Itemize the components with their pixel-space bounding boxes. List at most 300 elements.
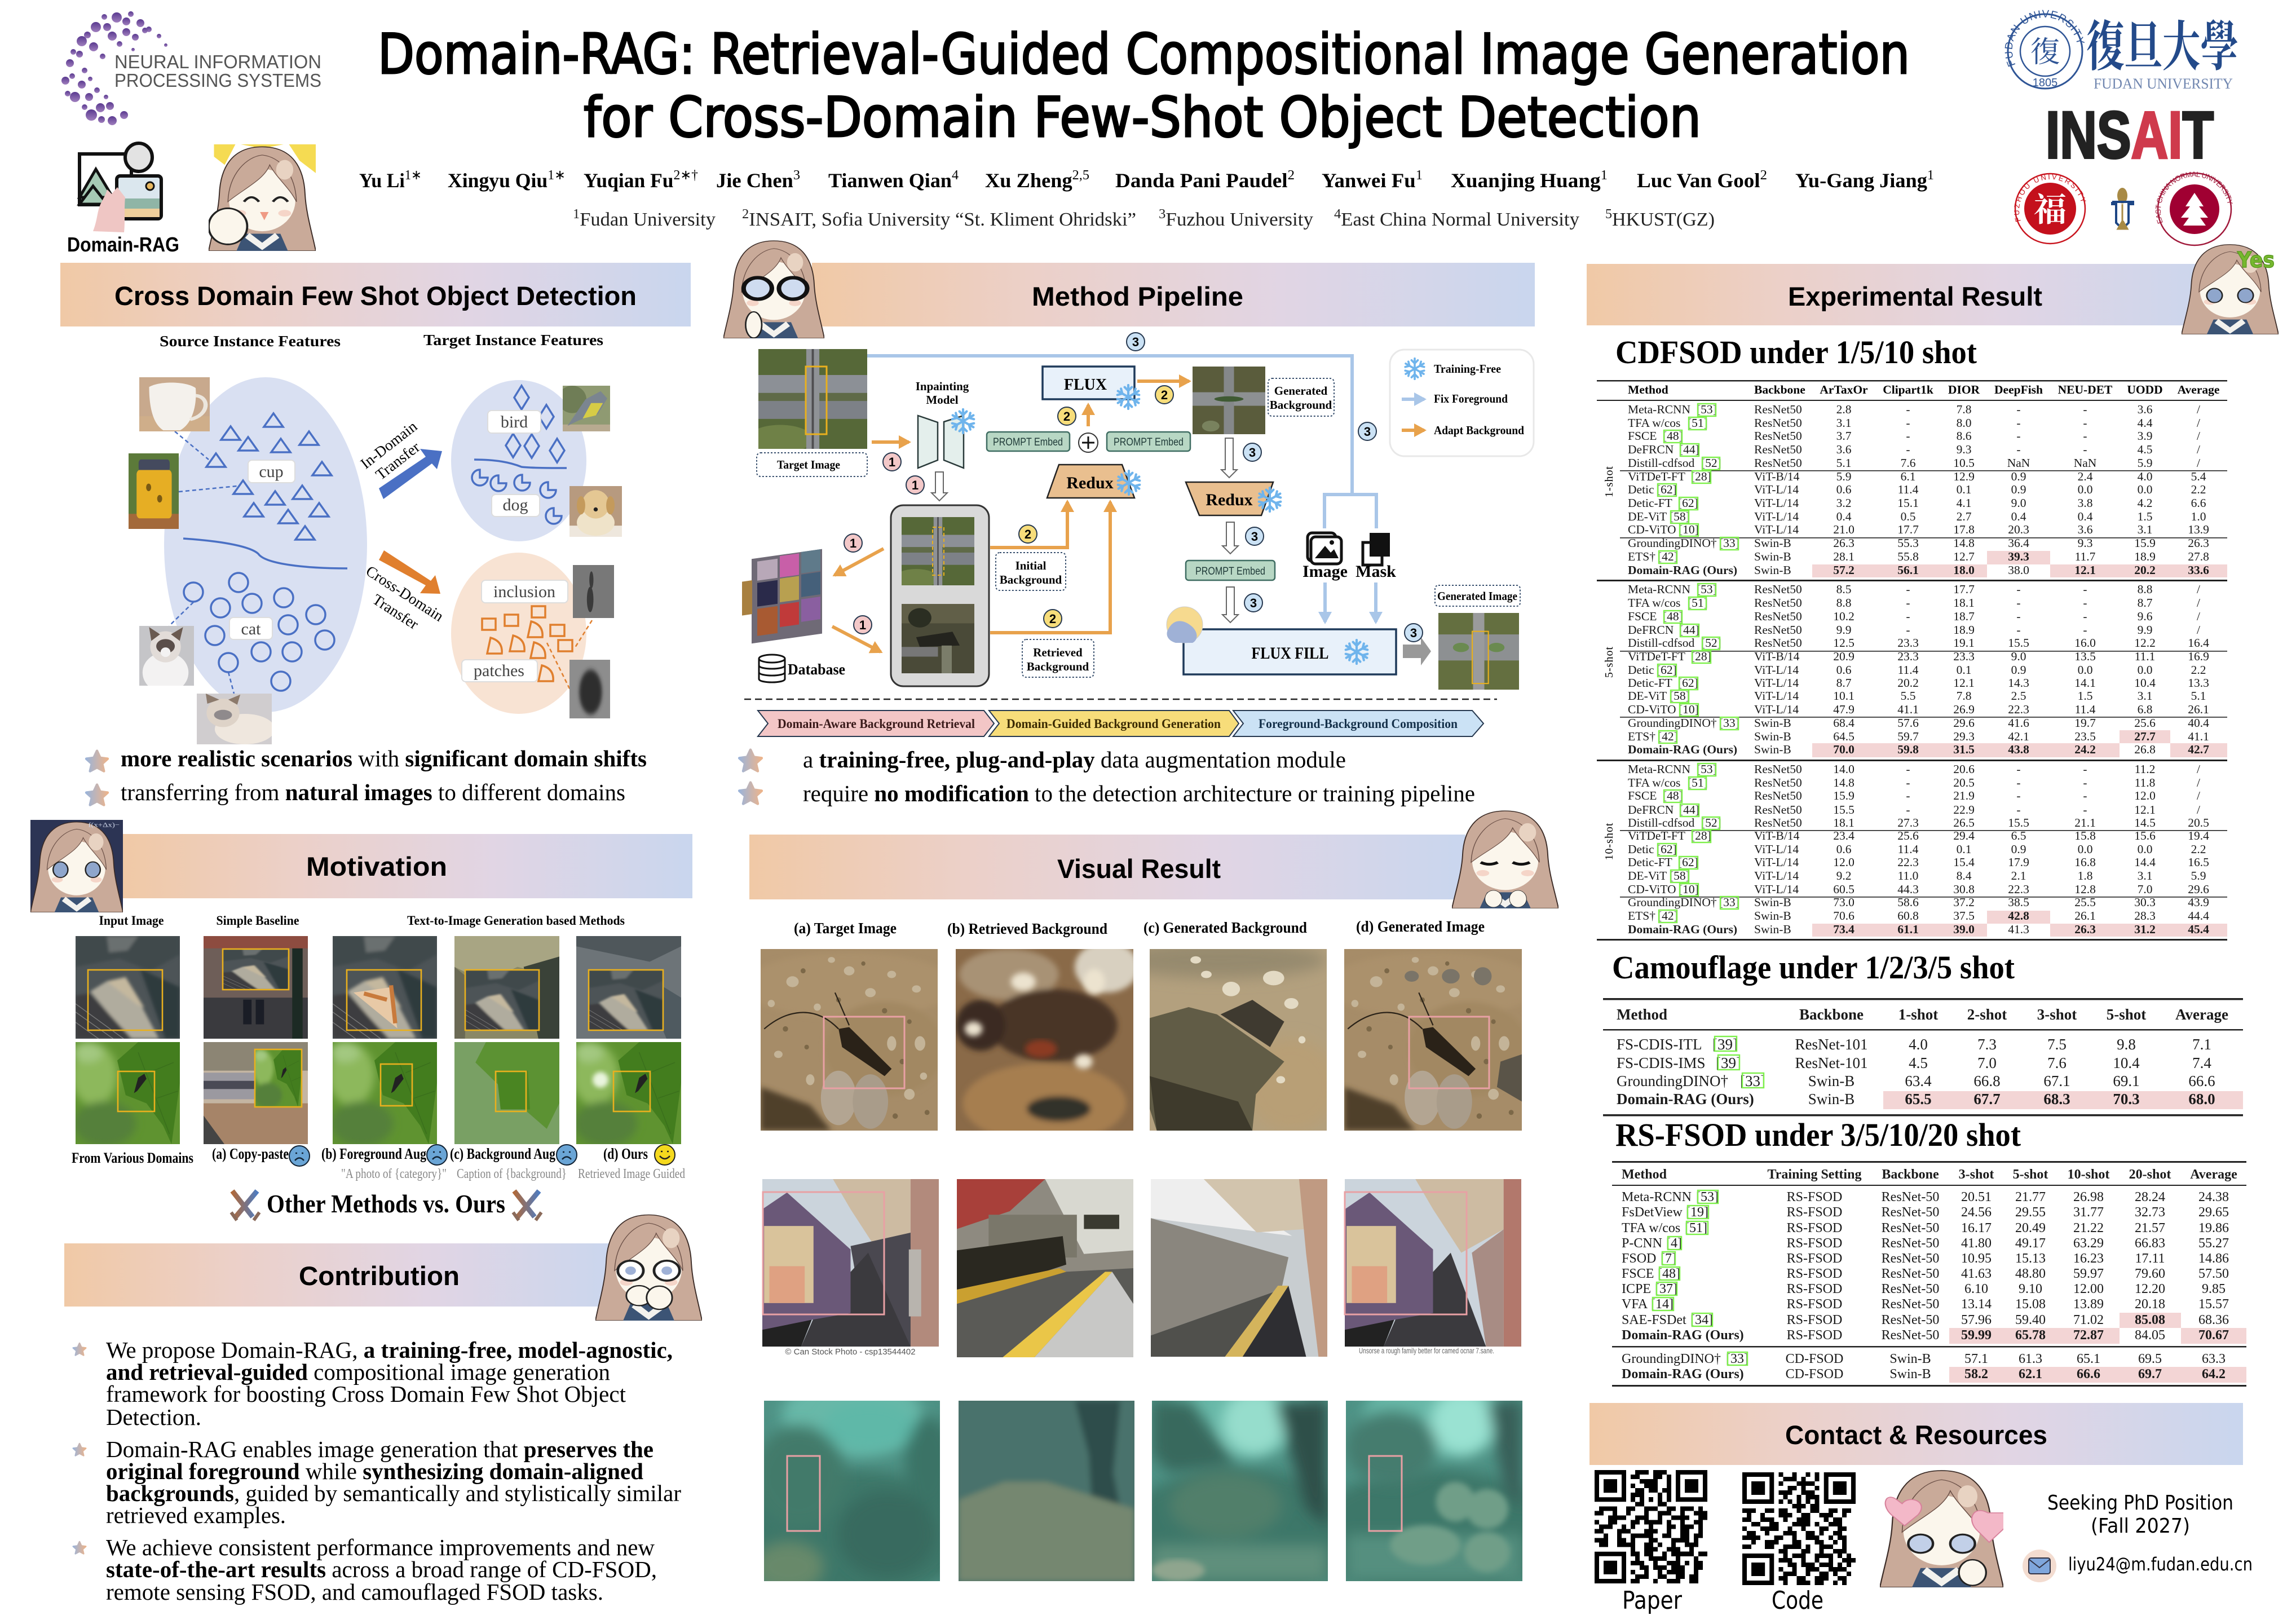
table: CDFSOD results: 7.0 <box>2138 882 2152 896</box>
table: CDFSOD results: ResNet50 <box>1754 456 1802 470</box>
step markers: 1 <box>850 536 856 550</box>
table: CDFSOD results: CD-ViTO <box>1628 882 1676 896</box>
table: CDFSOD results: 37.5 <box>1953 909 1975 923</box>
table: CDFSOD results: 14.5 <box>2134 816 2156 829</box>
table: RS-FSOD results: RS-FSOD <box>1787 1251 1842 1266</box>
table: RS-FSOD results: RS-FSOD <box>1787 1221 1842 1235</box>
bullet list: contributions: remote sensing FSOD, and camouflaged FSOD tasks. <box>106 1579 603 1605</box>
authors: 4 <box>952 168 959 183</box>
table: CDFSOD results: 55.8 <box>1897 550 1919 563</box>
table: RS-FSOD results: SAE-FSDet <box>1622 1313 1686 1327</box>
table: Camouflage results: 68.0 <box>2188 1091 2215 1107</box>
avatar: thinking <box>30 820 123 912</box>
table: RS-FSOD results: ResNet-50 <box>1882 1282 1939 1296</box>
table: RS-FSOD results: 64.2 <box>2202 1367 2226 1382</box>
table: CDFSOD results: Swin-B <box>1754 923 1791 936</box>
table: CDFSOD results: - <box>2083 762 2087 776</box>
table: Camouflage results: 1-shot <box>1898 1006 1938 1023</box>
image: generated background <box>1193 367 1265 434</box>
logo: INSAIT: INSAIT <box>2046 98 2214 173</box>
icon: snowflake <box>1259 488 1281 511</box>
table: CDFSOD results: 2.4 <box>2078 470 2093 483</box>
table: CDFSOD results: 30.3 <box>2134 895 2156 909</box>
table: CDFSOD results: 18.0 <box>1953 563 1975 577</box>
authors: Yu-Gang Jiang <box>1795 169 1926 192</box>
table: CDFSOD results: 41.6 <box>2008 716 2029 730</box>
icon: sun <box>1167 607 1203 643</box>
table: CDFSOD results: 59.8 <box>1897 743 1919 756</box>
figure: image comparison grid: From Various Domains <box>72 1150 193 1166</box>
table: RS-FSOD results: 63.29 <box>2073 1236 2104 1251</box>
table: CDFSOD results: 56.1 <box>1897 563 1919 577</box>
arrow <box>1221 438 1237 478</box>
logo: NeurIPS: PROCESSING SYSTEMS <box>114 70 321 91</box>
table: RS-FSOD results: VFA <box>1622 1297 1648 1312</box>
table: CDFSOD results: 4.0 <box>2138 470 2152 483</box>
table: CDFSOD results: 20.6 <box>1953 762 1975 776</box>
table: CDFSOD results: 23.5 <box>2074 730 2096 743</box>
bullet list: contributions: retrieved examples. <box>106 1502 286 1528</box>
table: CDFSOD results: - <box>1906 596 1910 610</box>
figure: image comparison grid: (c) Background Aug <box>450 1145 555 1162</box>
table: CDFSOD results: 9.3 <box>2078 536 2092 550</box>
table: CDFSOD results: 16.9 <box>2188 650 2209 663</box>
table: RS-FSOD results: 72.87 <box>2073 1328 2104 1343</box>
figure: image comparison grid: (b) Foreground Aug <box>321 1145 426 1162</box>
heading: Method Pipeline: Method Pipeline <box>1032 281 1243 311</box>
table: RS-FSOD results: FsDetView <box>1622 1205 1683 1220</box>
bullet list: contributions: backgrounds, guided by semantically and stylistically similar <box>106 1480 681 1506</box>
table: CDFSOD results: ResNet50 <box>1754 443 1802 456</box>
table: CDFSOD results: 26.3 <box>2188 536 2209 550</box>
table: CDFSOD results: Swin-B <box>1754 909 1791 923</box>
table: RS-FSOD results: 24.56 <box>1961 1205 1992 1220</box>
table: CDFSOD results: 15.9 <box>1833 789 1855 802</box>
table: RS-FSOD results: 10.95 <box>1961 1251 1992 1266</box>
table: CDFSOD results: 1-shot <box>1603 466 1615 497</box>
table: Camouflage results: 7.0 <box>1977 1054 1997 1071</box>
table: CDFSOD results: 16.0 <box>2074 636 2096 650</box>
table: CDFSOD results: 0.4 <box>2078 510 2093 523</box>
table: RS-FSOD results: 48.80 <box>2015 1266 2046 1281</box>
table: CDFSOD results: 27.8 <box>2188 550 2209 563</box>
label: retrieved background: Background <box>1027 660 1089 673</box>
table: CDFSOD results: 0.0 <box>2138 483 2152 496</box>
stage: domain-aware background retrieval <box>758 710 994 736</box>
table: CDFSOD results: 5.1 <box>2191 689 2206 703</box>
table: CDFSOD results: [10] <box>1679 882 1699 896</box>
table: RS-FSOD results: ResNet-50 <box>1882 1205 1939 1220</box>
table: CDFSOD results: Detic-FT <box>1628 855 1672 869</box>
table: CDFSOD results: 16.4 <box>2188 636 2209 650</box>
table: CDFSOD results: - <box>2016 429 2021 443</box>
table: CDFSOD results: 7.8 <box>1957 689 1971 703</box>
icon: sad face <box>427 1145 447 1165</box>
bullet points <box>86 745 647 805</box>
column labels: (c) Generated Background <box>1143 919 1307 936</box>
table: CDFSOD results: 2.8 <box>1836 403 1851 416</box>
table: CDFSOD results: 6.6 <box>2191 496 2206 510</box>
table: CDFSOD results: 0.9 <box>2011 842 2026 856</box>
table: CDFSOD results: ResNet50 <box>1754 816 1802 829</box>
bullet list: contributions: original foreground while synthesizing domain-aligned <box>106 1458 643 1484</box>
table: RS-FSOD results: 20-shot <box>2129 1167 2171 1182</box>
avatar: surprised <box>595 1215 702 1321</box>
icon: image: Image <box>1302 562 1348 581</box>
table: CDFSOD results: GroundingDINO† <box>1628 536 1717 550</box>
table: CDFSOD results: - <box>2083 789 2087 802</box>
table: CDFSOD results: 26.3 <box>2074 923 2096 936</box>
table: CDFSOD results: 29.4 <box>1953 829 1975 842</box>
figure: image comparison grid: "A photo of {category}" <box>341 1167 447 1181</box>
table: CDFSOD results: 14.0 <box>1833 762 1855 776</box>
table: CDFSOD results: 15.4 <box>1953 855 1975 869</box>
heading: Visual Result <box>749 835 1465 899</box>
table: RS-FSOD results: 29.55 <box>2015 1205 2046 1220</box>
authors: 1∗ <box>547 168 566 183</box>
stage: foreground-background composition <box>1233 710 1483 736</box>
table: RS-FSOD results: ResNet-50 <box>1882 1251 1939 1266</box>
table: CDFSOD results: - <box>2083 403 2087 416</box>
table: CDFSOD results: 25.6 <box>2134 716 2156 730</box>
table: Camouflage results: Swin-B <box>1808 1091 1855 1107</box>
bullet points: more realistic scenarios with significant domain shifts <box>121 745 647 771</box>
table: Camouflage results: Domain-RAG (Ours) <box>1617 1091 1754 1107</box>
table: CDFSOD results: [58] <box>1670 869 1690 882</box>
panel: Contribution <box>64 1215 702 1605</box>
table: CDFSOD results: Detic <box>1628 483 1654 496</box>
diagram: feature space transfer: Cross-Domain <box>363 562 447 625</box>
table: CDFSOD results: - <box>1906 803 1910 817</box>
table: RS-FSOD results: 79.60 <box>2135 1266 2165 1281</box>
table: CDFSOD results: 3.6 <box>2078 523 2093 536</box>
table: CDFSOD results: 25.5 <box>2074 895 2096 909</box>
table: CDFSOD results: 15.9 <box>2134 536 2156 550</box>
panel: Motivation <box>30 820 692 1220</box>
table: Camouflage results: [39] <box>1716 1054 1741 1071</box>
table: CDFSOD results: / <box>2197 443 2200 456</box>
table: CDFSOD results: [10] <box>1679 523 1699 536</box>
step markers: 3 <box>1410 626 1417 640</box>
table: CDFSOD results: [48] <box>1663 429 1683 443</box>
table: CDFSOD results: 14.8 <box>1953 536 1975 550</box>
table: CDFSOD results: 15.8 <box>2074 829 2096 842</box>
table: CDFSOD results: 38.0 <box>2008 563 2029 577</box>
table: CDFSOD results: Meta-RCNN <box>1628 403 1691 416</box>
table: RS-FSOD results: 15.13 <box>2015 1251 2046 1266</box>
step markers: 3 <box>1249 445 1256 460</box>
arrow <box>832 626 881 652</box>
table: CDFSOD results: / <box>2197 582 2200 596</box>
logo: Fudan University: 1805 <box>2033 77 2057 89</box>
panel: Experimental Result <box>1587 245 2279 1387</box>
table: CDFSOD results: 11.4 <box>1898 842 1919 856</box>
label: generated image <box>1435 585 1520 606</box>
table: RS-FSOD results: [4] <box>1666 1236 1682 1251</box>
image: target image <box>748 349 867 453</box>
table: CDFSOD results: 4.2 <box>2138 496 2152 510</box>
table: RS-FSOD results: 63.3 <box>2202 1352 2226 1366</box>
table: RS-FSOD results: 13.89 <box>2073 1297 2104 1312</box>
diagram: feature space transfer: bird <box>501 413 528 431</box>
table: RS-FSOD results: 65.78 <box>2015 1328 2046 1343</box>
table: RS-FSOD results: [34] <box>1690 1313 1713 1327</box>
affiliations: HKUST(GZ) <box>1612 209 1715 230</box>
table: CDFSOD results: 2.2 <box>2191 842 2206 856</box>
image: inclusion defect <box>573 565 614 618</box>
image: cat 2 <box>197 694 272 744</box>
bullet list: contributions: Detection. <box>106 1404 201 1430</box>
panel: Cross Domain Few Shot Object Detection <box>60 263 691 805</box>
table: CDFSOD results: 0.1 <box>1957 483 1971 496</box>
table: CDFSOD results: 0.1 <box>1957 663 1971 677</box>
table: CDFSOD results: 6.1 <box>1901 470 1915 483</box>
table: CDFSOD results: Meta-RCNN <box>1628 582 1691 596</box>
table: CDFSOD results: Clipart1k <box>1883 383 1933 396</box>
table: CDFSOD results: ResNet50 <box>1754 429 1802 443</box>
table: CDFSOD results: [62] <box>1657 842 1677 856</box>
table: CDFSOD results: / <box>2197 610 2200 623</box>
table: CDFSOD results: 0.9 <box>2011 470 2026 483</box>
table: CDFSOD results: - <box>1906 416 1910 430</box>
label: inpainting model: Inpainting <box>916 379 969 393</box>
table: RS-FSOD results: 69.5 <box>2138 1352 2162 1366</box>
table: CDFSOD results: 73.0 <box>1833 895 1855 909</box>
table: Camouflage results: 2-shot <box>1967 1006 2007 1023</box>
table: Camouflage results: 66.8 <box>1973 1073 2001 1089</box>
table: CDFSOD results: 3.6 <box>2138 403 2153 416</box>
table: RS-FSOD results: Backbone <box>1882 1167 1939 1182</box>
table: CDFSOD results: 0.0 <box>2078 842 2092 856</box>
label: inpainting model: Model <box>926 393 959 407</box>
table: CDFSOD results: 7.8 <box>1957 403 1971 416</box>
avatar: yes: Yes <box>2237 248 2275 272</box>
table: CDFSOD results: [48] <box>1663 789 1683 802</box>
table: CDFSOD results: - <box>2016 443 2021 456</box>
bullet points: a training-free, plug-and-play data augmentation module <box>803 747 1346 773</box>
stage: domain-aware background retrieval: Domain-Aware Background Retrieval <box>778 717 975 731</box>
table: CDFSOD results: Average <box>2178 383 2219 396</box>
table: CDFSOD results: 22.3 <box>1897 855 1919 869</box>
table: CDFSOD results: 8.5 <box>1836 582 1851 596</box>
table: CDFSOD results: 0.6 <box>1836 663 1852 677</box>
stage: domain-guided background generation: Domain-Guided Background Generation <box>1006 717 1221 731</box>
table: CDFSOD results: 22.3 <box>2008 703 2029 716</box>
table: CDFSOD results: / <box>2197 416 2200 430</box>
logo: HKUST <box>2112 188 2133 229</box>
table: RS-FSOD results: RS-FSOD <box>1787 1313 1842 1327</box>
table: CDFSOD results: [52] <box>1701 816 1721 829</box>
table: CDFSOD results: DIOR <box>1948 383 1980 396</box>
table: CDFSOD results: Detic-FT <box>1628 676 1672 690</box>
table: RS-FSOD results: 59.40 <box>2015 1313 2046 1327</box>
table: RS-FSOD results: 9.10 <box>2019 1282 2042 1296</box>
table: CDFSOD results <box>1597 380 2227 941</box>
table: RS-FSOD results: ResNet-50 <box>1882 1221 1939 1235</box>
table: CDFSOD results: ViT-B/14 <box>1754 470 1800 483</box>
table: CDFSOD results: 3.1 <box>2138 523 2152 536</box>
step markers: 1 <box>859 618 866 632</box>
table: CDFSOD results: 3.6 <box>1836 443 1852 456</box>
table: CDFSOD results: 14.1 <box>2074 676 2096 690</box>
table: CDFSOD results: 3.9 <box>2138 429 2152 443</box>
table: CDFSOD results: 42.1 <box>2008 730 2029 743</box>
table: CDFSOD results: - <box>2016 803 2021 817</box>
heading: Motivation <box>123 834 692 898</box>
icon: database <box>759 655 785 682</box>
table: CDFSOD results: 10.1 <box>1833 689 1855 703</box>
table: CDFSOD results: Backbone <box>1754 383 1805 396</box>
box: Redux: Redux <box>1066 474 1114 492</box>
table: CDFSOD results: 14.8 <box>1833 776 1855 789</box>
table: RS-FSOD results: [7] <box>1661 1251 1676 1266</box>
table: Camouflage results: Backbone <box>1799 1006 1864 1023</box>
table: CDFSOD results: CD-ViTO <box>1628 703 1676 716</box>
table: CDFSOD results: ViT-L/14 <box>1754 842 1799 856</box>
label: initial background: Initial <box>1015 559 1047 572</box>
table: RS-FSOD results: 28.24 <box>2135 1190 2165 1204</box>
table: CDFSOD results: 9.0 <box>2011 496 2026 510</box>
table: RS-FSOD results: 59.97 <box>2073 1266 2104 1281</box>
table: CDFSOD results: 38.5 <box>2008 895 2029 909</box>
table: CDFSOD results: 3.1 <box>2138 689 2152 703</box>
table: CDFSOD results: Swin-B <box>1754 563 1791 577</box>
table: CDFSOD results: DE-ViT <box>1628 689 1667 703</box>
table: RS-FSOD results: 68.36 <box>2198 1313 2229 1327</box>
table: CDFSOD results: ResNet50 <box>1754 762 1802 776</box>
table: RS-FSOD results: [37] <box>1655 1282 1677 1296</box>
table: CDFSOD results: DeFRCN <box>1628 623 1674 637</box>
authors: 1 <box>1601 168 1608 183</box>
QR code: code <box>1742 1472 1856 1585</box>
label: Code: Code <box>1772 1586 1823 1615</box>
table: CDFSOD results: 20.3 <box>2008 523 2029 536</box>
table: CDFSOD results: 68.4 <box>1833 716 1855 730</box>
table: CDFSOD results: [51] <box>1688 416 1708 430</box>
heading: Cross Domain Few Shot Object Detection <box>60 263 691 326</box>
arrow <box>1222 587 1238 623</box>
table: CDFSOD results: 5.9 <box>2191 869 2206 882</box>
authors: Xingyu Qiu <box>448 169 549 192</box>
table: RS-FSOD results: RS-FSOD <box>1787 1205 1842 1220</box>
step markers: 2 <box>1161 388 1168 402</box>
table: CDFSOD results: 26.8 <box>2134 743 2156 756</box>
table: CDFSOD results: 18.7 <box>1953 610 1975 623</box>
table: RS-FSOD results: 62.1 <box>2019 1367 2042 1382</box>
heading: Method Pipeline <box>812 263 1535 326</box>
table: RS-FSOD results: ResNet-50 <box>1882 1313 1939 1327</box>
table: CDFSOD results: ResNet50 <box>1754 803 1802 817</box>
table: CDFSOD results: NaN <box>2074 456 2097 470</box>
table: RS-FSOD results: Domain-RAG (Ours) <box>1622 1367 1744 1382</box>
table: CDFSOD results: Distill-cdfsod <box>1628 636 1694 650</box>
logo: Fuzhou University: 福 <box>2034 192 2067 228</box>
table: RS-FSOD results: 3-shot <box>1959 1167 1994 1182</box>
table: CDFSOD results: [62] <box>1678 855 1698 869</box>
box: Redux <box>1047 465 1134 498</box>
table: RS-FSOD results: ResNet-50 <box>1882 1190 1939 1204</box>
icon: mask <box>1355 533 1396 581</box>
logo: East China Normal University: EAST CHINA NORMAL UNIVERSITY <box>2155 171 2233 224</box>
table: CDFSOD results: 0.4 <box>2011 510 2026 523</box>
logo: Fuzhou University: FUZHOU UNIVERSITY <box>2014 174 2086 222</box>
table: CDFSOD results: 21.0 <box>1833 523 1855 536</box>
table: CDFSOD results: 20.9 <box>1833 650 1855 663</box>
label: generated background: Generated <box>1274 384 1328 398</box>
table: CDFSOD results: 18.1 <box>1833 816 1855 829</box>
arrow <box>1403 637 1431 665</box>
table: CDFSOD results: Swin-B <box>1754 743 1791 756</box>
table: RS-FSOD results: [33] <box>1726 1352 1749 1366</box>
box: FLUX: FLUX <box>1064 376 1107 394</box>
table: CDFSOD results: 29.3 <box>1953 730 1975 743</box>
table: CDFSOD results: 26.5 <box>1953 816 1975 829</box>
table: CDFSOD results: 5.5 <box>1901 689 1915 703</box>
table: CDFSOD results: - <box>2083 582 2087 596</box>
table: RS-FSOD results: 6.10 <box>1964 1282 1988 1296</box>
table: RS-FSOD results <box>1612 1161 2246 1387</box>
table: Camouflage results: 7.1 <box>2192 1036 2211 1053</box>
table: CDFSOD results: 43.9 <box>2188 895 2209 909</box>
table: CDFSOD results: 11.4 <box>1898 663 1919 677</box>
table: CDFSOD results: 1.0 <box>2191 510 2206 523</box>
table: RS-FSOD results: GroundingDINO† <box>1622 1352 1721 1366</box>
table: CDFSOD results: 10.5 <box>1953 456 1975 470</box>
table: CDFSOD results: Method <box>1628 383 1668 396</box>
table: CDFSOD results: 45.4 <box>2188 923 2209 936</box>
table: CDFSOD results: - <box>2016 596 2021 610</box>
diagram: feature space transfer: Target Instance Features <box>423 332 603 348</box>
table: CDFSOD results: 23.4 <box>1833 829 1855 842</box>
table: CDFSOD results: TFA w/cos <box>1628 596 1680 610</box>
table: RS-FSOD results: 49.17 <box>2015 1236 2046 1251</box>
arrow <box>931 472 947 501</box>
label: target image <box>757 453 867 476</box>
image: cup <box>139 377 210 431</box>
table: CDFSOD results: 60.5 <box>1833 882 1855 896</box>
logo: Fudan University: FUDAN UNIVERSITY <box>2094 76 2233 92</box>
table: RS-FSOD results: 61.3 <box>2019 1352 2042 1366</box>
box: FLUX FILL <box>1184 629 1396 674</box>
table: RS-FSOD results: [19] <box>1686 1205 1708 1220</box>
label: generated background <box>1268 378 1334 416</box>
table: CDFSOD results: [62] <box>1678 496 1698 510</box>
table: CDFSOD results: 28.3 <box>2134 909 2156 923</box>
authors: 3 <box>793 168 800 183</box>
label: database: Database <box>788 661 845 678</box>
diagram: feature space transfer: inclusion <box>493 582 555 601</box>
arrow <box>1137 379 1189 383</box>
table: CDFSOD results: 2.5 <box>2011 689 2026 703</box>
table: CDFSOD results: 13.5 <box>2074 650 2096 663</box>
table: CDFSOD results: ResNet50 <box>1754 776 1802 789</box>
table: CDFSOD results: 12.7 <box>1953 550 1975 563</box>
table: CDFSOD results: 0.1 <box>1957 842 1971 856</box>
table: RS-FSOD results: 16.17 <box>1961 1221 1992 1235</box>
avatar: glasses <box>723 241 824 338</box>
text: seeking PhD position <box>2047 1491 2233 1538</box>
table: CDFSOD results: [62] <box>1657 483 1677 496</box>
table: CDFSOD results: ViTDeT-FT <box>1628 650 1685 663</box>
icon: sad face <box>289 1146 310 1166</box>
table: CDFSOD results: 0.0 <box>2138 842 2152 856</box>
table: CDFSOD results: 18.9 <box>2134 550 2156 563</box>
arrow <box>990 502 1110 633</box>
table: CDFSOD results: 17.8 <box>1953 523 1975 536</box>
table: RS-FSOD results: 19.86 <box>2198 1221 2229 1235</box>
table: RS-FSOD results: ResNet-50 <box>1882 1328 1939 1343</box>
table: CDFSOD results: 42.7 <box>2188 743 2209 756</box>
